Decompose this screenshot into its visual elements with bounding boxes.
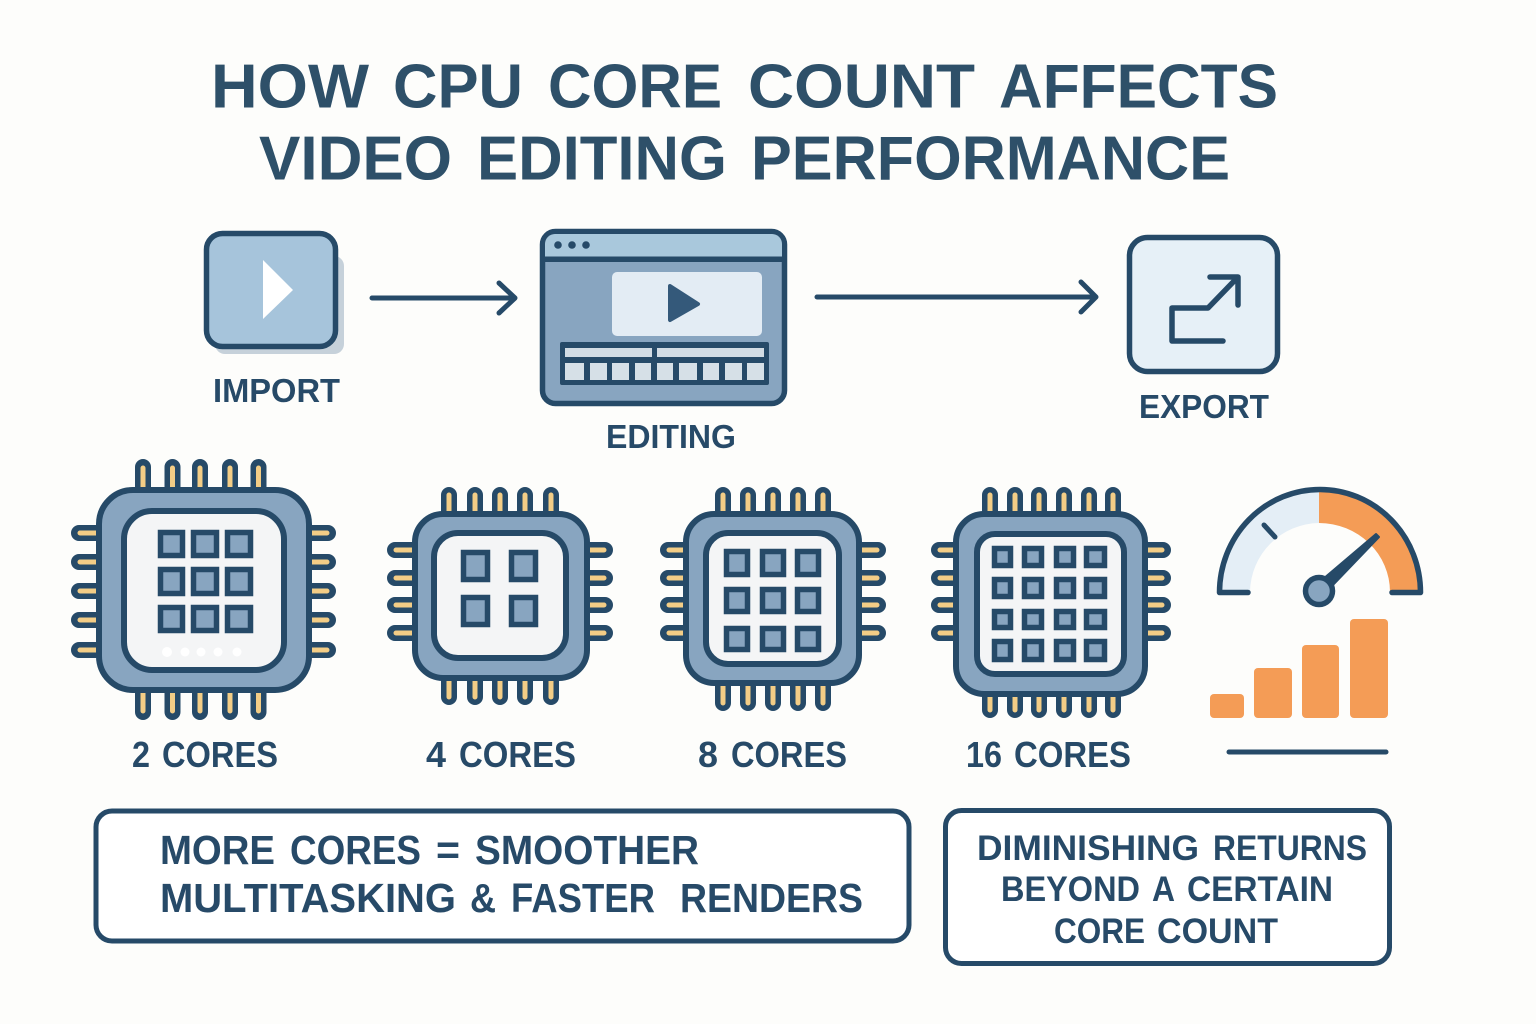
- callout: more cores: FASTER: [511, 875, 655, 921]
- chip: 4 cores: [395, 495, 605, 697]
- label: 2 cores: 2: [132, 734, 150, 775]
- chip: 8 cores: [668, 495, 878, 703]
- label: 16 cores: [966, 734, 1131, 775]
- title: [211, 52, 1278, 194]
- callout: diminishing returns: A: [1152, 870, 1175, 909]
- callout: diminishing returns: COUNT: [1157, 912, 1278, 951]
- callout: more cores: SMOOTHER: [475, 827, 699, 873]
- label: 8 cores: 8: [698, 734, 718, 775]
- label: 4 cores: 4: [426, 734, 446, 775]
- bar chart: [1210, 619, 1388, 718]
- editing label: EDITING: [606, 418, 736, 455]
- callout: diminishing returns: CORE: [1054, 912, 1145, 951]
- title: PERFORMANCE: [751, 124, 1230, 194]
- icon: export: [1130, 238, 1278, 372]
- label: 4 cores: CORES: [459, 734, 576, 775]
- title: HOW: [211, 52, 369, 122]
- callout: diminishing returns: [946, 810, 1390, 964]
- callout: diminishing returns: BEYOND: [1001, 870, 1140, 909]
- callout: more cores: CORES: [290, 827, 421, 873]
- gauge: [1220, 490, 1420, 604]
- chip: 2 cores: [79, 467, 328, 712]
- arrow: editing to export: [817, 282, 1096, 312]
- callout: diminishing returns: RETURNS: [1213, 829, 1367, 868]
- callout: more cores: MORE: [160, 827, 275, 873]
- title: VIDEO: [259, 124, 452, 194]
- title: COUNT: [748, 52, 975, 122]
- baseline: [1229, 750, 1386, 754]
- title: CPU: [393, 52, 523, 122]
- title: CORE: [548, 52, 722, 122]
- callout: diminishing returns: CERTAIN: [1187, 870, 1333, 909]
- title: EDITING: [477, 124, 727, 194]
- label: 2 cores: CORES: [162, 734, 278, 775]
- label: 16 cores: CORES: [1014, 734, 1131, 775]
- export label: EXPORT: [1139, 388, 1269, 425]
- callout: more cores: MULTITASKING: [160, 875, 456, 921]
- import label: IMPORT: [213, 372, 340, 409]
- chip: 16 cores: [939, 495, 1163, 710]
- label: 16 cores: 16: [966, 734, 1002, 775]
- callout: diminishing returns: DIMINISHING: [977, 829, 1199, 868]
- callout: more cores: =: [436, 827, 460, 873]
- icon: editing window: [542, 232, 785, 404]
- callout: more cores: [96, 811, 909, 941]
- callout: more cores: &: [470, 875, 496, 921]
- icon: import: [206, 234, 344, 354]
- arrow: import to editing: [372, 283, 515, 313]
- callout: more cores: RENDERS: [680, 875, 863, 921]
- label: 8 cores: CORES: [731, 734, 847, 775]
- title: AFFECTS: [999, 52, 1278, 122]
